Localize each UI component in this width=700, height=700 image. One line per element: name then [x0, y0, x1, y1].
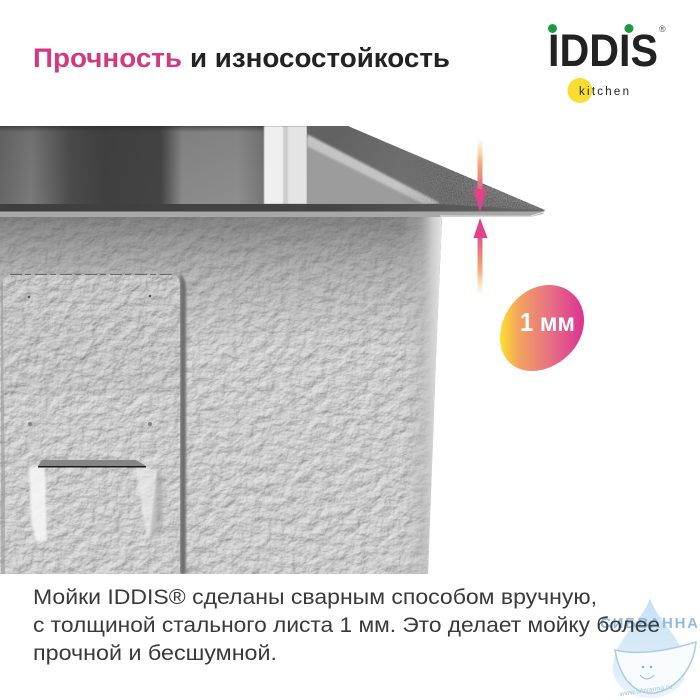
watermark name: СИБВАННА: [600, 615, 698, 632]
sink body: textured outer wall: [0, 217, 445, 575]
brand logo: IDDIS kitchen: ®: [659, 24, 666, 34]
title: [33, 43, 450, 73]
tab shadow: [177, 274, 186, 574]
title: и износостойкость: [190, 43, 450, 73]
watermark drop: [613, 598, 686, 698]
body text: Мойки IDDIS® сделаны сварным способом вручную,: [33, 586, 597, 609]
mounting tab: [0, 274, 186, 575]
tab screw holes: [28, 296, 30, 298]
title: Прочность: [33, 43, 182, 73]
flange top surface: [0, 204, 545, 212]
thickness badge: 1 мм: [500, 285, 584, 371]
watermark: Sibvanna: [600, 598, 698, 698]
body text: прочной и бесшумной.: [33, 642, 277, 665]
reflection highlights: [264, 126, 307, 204]
logo yellow spot: [568, 78, 592, 103]
body text: [33, 586, 660, 665]
thickness badge: 1 мм: 1 мм: [520, 307, 575, 337]
sink photo: steel bowl and flange: [0, 126, 547, 217]
body text: с толщиной стального листа 1 мм. Это делает мойку более: [33, 614, 660, 637]
logo kitchen caption: kitchen: [579, 86, 629, 98]
brand logo: IDDIS kitchen: [548, 24, 666, 103]
right corner edge: [406, 217, 442, 574]
bowl interior: [0, 126, 547, 216]
arrow: thickness from above: [473, 140, 487, 212]
arrow: thickness from below: [474, 218, 488, 294]
stamped clip: [29, 460, 163, 541]
flange front edge: [0, 210, 545, 217]
watermark url: www.sibvanna.ru: [618, 684, 673, 698]
logo wordmark: IDDIS: [548, 25, 658, 76]
watermark bath mascot: [615, 642, 696, 693]
